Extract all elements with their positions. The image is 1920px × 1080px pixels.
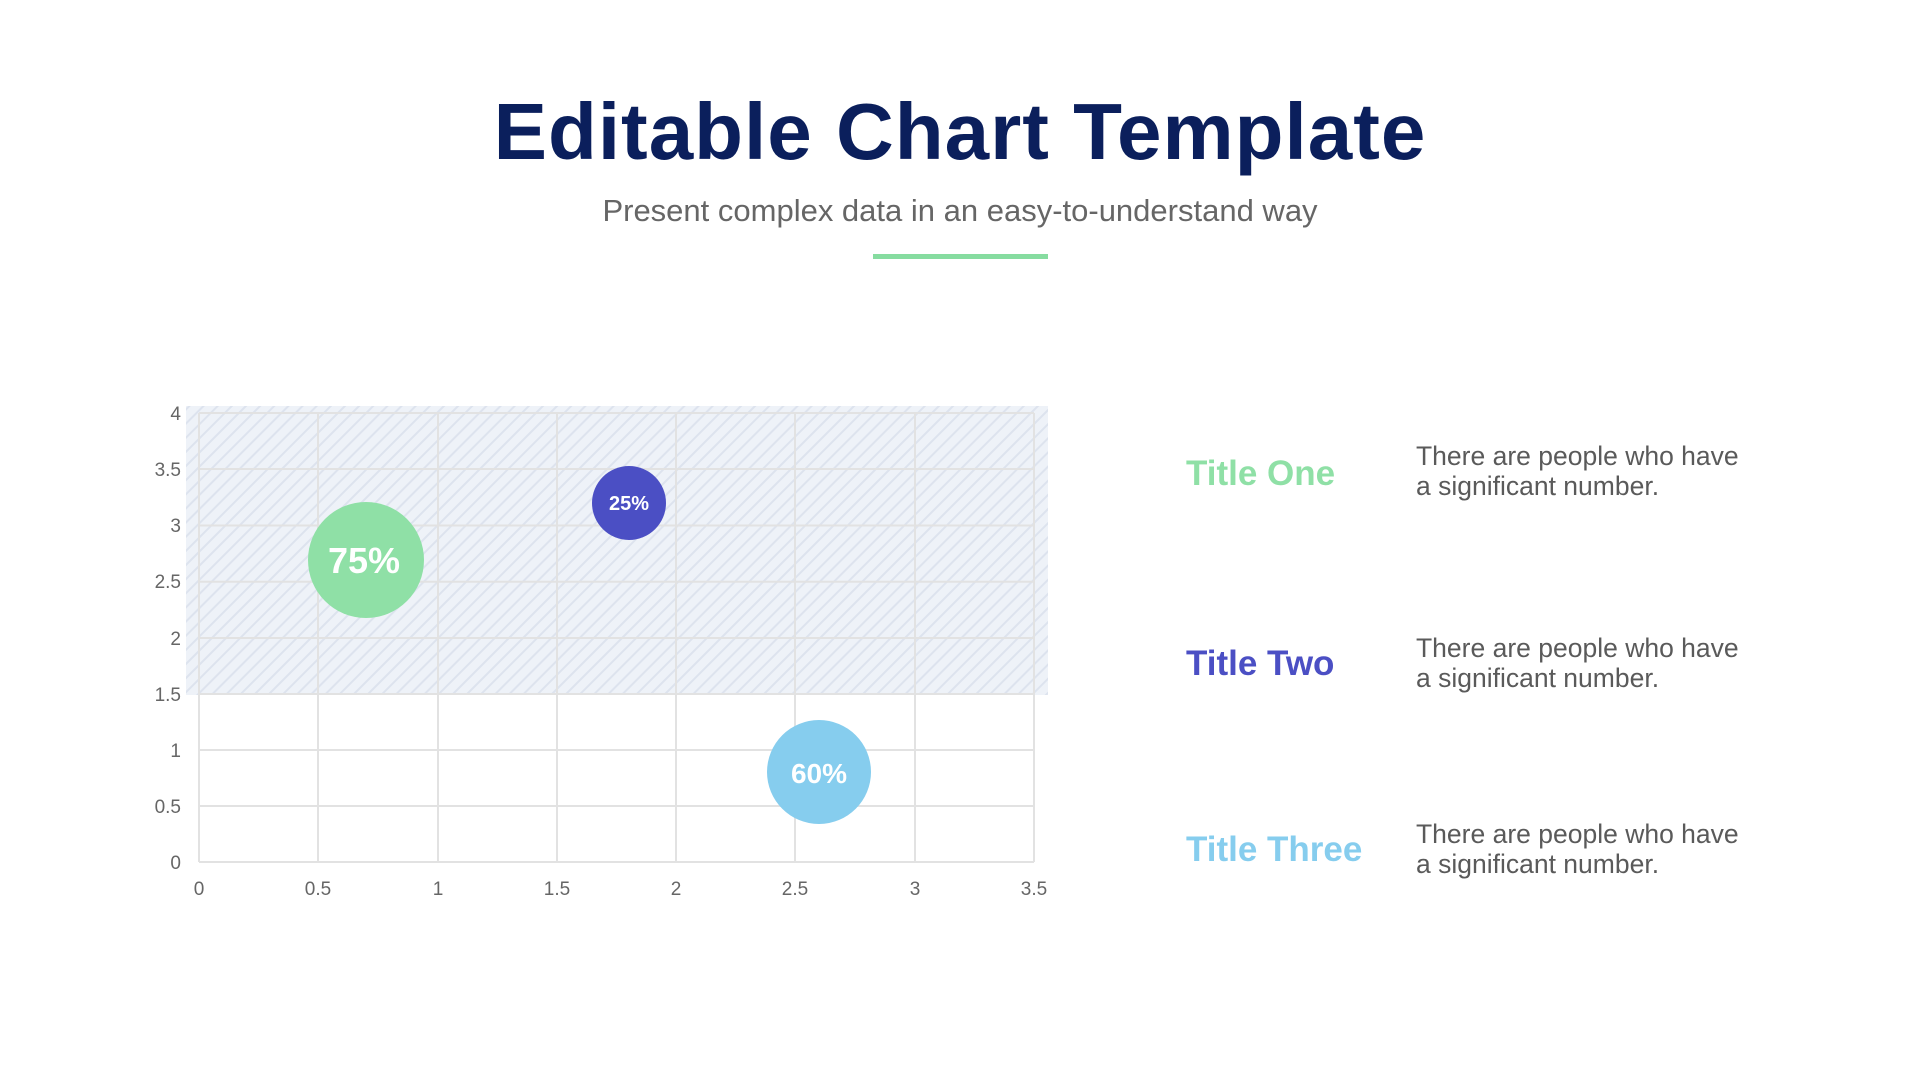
y axis labels: 3.5 <box>155 460 181 481</box>
item: title three <box>1186 819 1739 879</box>
y axis labels: 1 <box>170 741 181 762</box>
heading: title three: Title Three <box>1186 830 1362 869</box>
accent underline <box>873 254 1048 259</box>
text: title two description: a significant number. <box>1416 663 1659 693</box>
text: title two description <box>1416 633 1739 693</box>
bubble: 75%: 75% <box>328 540 400 581</box>
item: title one <box>1186 441 1739 501</box>
x axis labels <box>194 879 1047 900</box>
y axis labels: 4 <box>170 404 181 425</box>
x axis labels: 2.5 <box>782 879 808 900</box>
item: title two <box>1186 633 1739 693</box>
x axis labels: 2 <box>671 879 681 900</box>
heading: title one: Title One <box>1186 454 1335 493</box>
bubble: 25% <box>592 466 666 540</box>
text: title one description: There are people who have <box>1416 441 1739 471</box>
text: title two description: There are people who have <box>1416 633 1739 663</box>
subtitle: Present complex data in an easy-to-understand way <box>602 193 1318 228</box>
x axis labels: 0.5 <box>305 879 331 900</box>
y axis labels: 2.5 <box>155 572 181 593</box>
text: title three description <box>1416 819 1739 879</box>
text: title one description: a significant number. <box>1416 471 1659 501</box>
y axis labels: 1.5 <box>155 685 181 706</box>
heading: title two: Title Two <box>1186 644 1334 683</box>
y axis labels <box>155 404 181 874</box>
y axis labels: 3 <box>170 516 181 537</box>
x axis labels: 1.5 <box>544 879 570 900</box>
text: title three description: There are people who have <box>1416 819 1739 849</box>
x axis labels: 3 <box>910 879 920 900</box>
x axis labels: 0 <box>194 879 204 900</box>
x axis labels: 1 <box>433 879 443 900</box>
title: Editable Chart Template <box>494 87 1426 176</box>
y axis labels: 2 <box>170 629 181 650</box>
bubble: 60% <box>767 720 871 824</box>
x axis labels: 3.5 <box>1021 879 1047 900</box>
y axis labels: 0 <box>170 853 181 874</box>
text: title three description: a significant number. <box>1416 849 1659 879</box>
bubble: 75% <box>308 502 424 618</box>
bubble: 60%: 60% <box>791 758 847 789</box>
shaded band <box>186 406 1048 695</box>
text: title one description <box>1416 441 1739 501</box>
y axis labels: 0.5 <box>155 797 181 818</box>
bubble: 25%: 25% <box>609 493 649 515</box>
